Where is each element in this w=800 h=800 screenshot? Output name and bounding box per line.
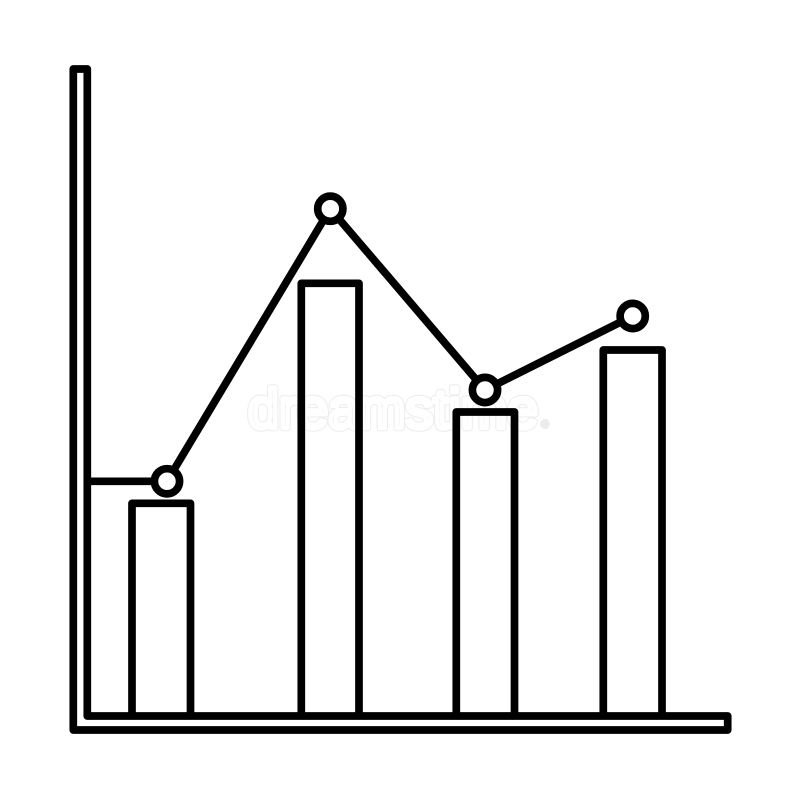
marker 1 <box>154 469 180 494</box>
watermark: dreamstime <box>248 377 538 440</box>
marker 3 <box>472 377 498 403</box>
marker 4 <box>620 303 645 329</box>
watermark: dreamstime <box>248 377 538 440</box>
bar 2 <box>301 283 359 716</box>
bar 1 <box>132 503 190 716</box>
bar 4 <box>603 350 662 716</box>
marker 2 <box>318 196 343 221</box>
axes <box>73 69 728 730</box>
line series <box>88 209 633 481</box>
bar 3 <box>456 412 514 716</box>
